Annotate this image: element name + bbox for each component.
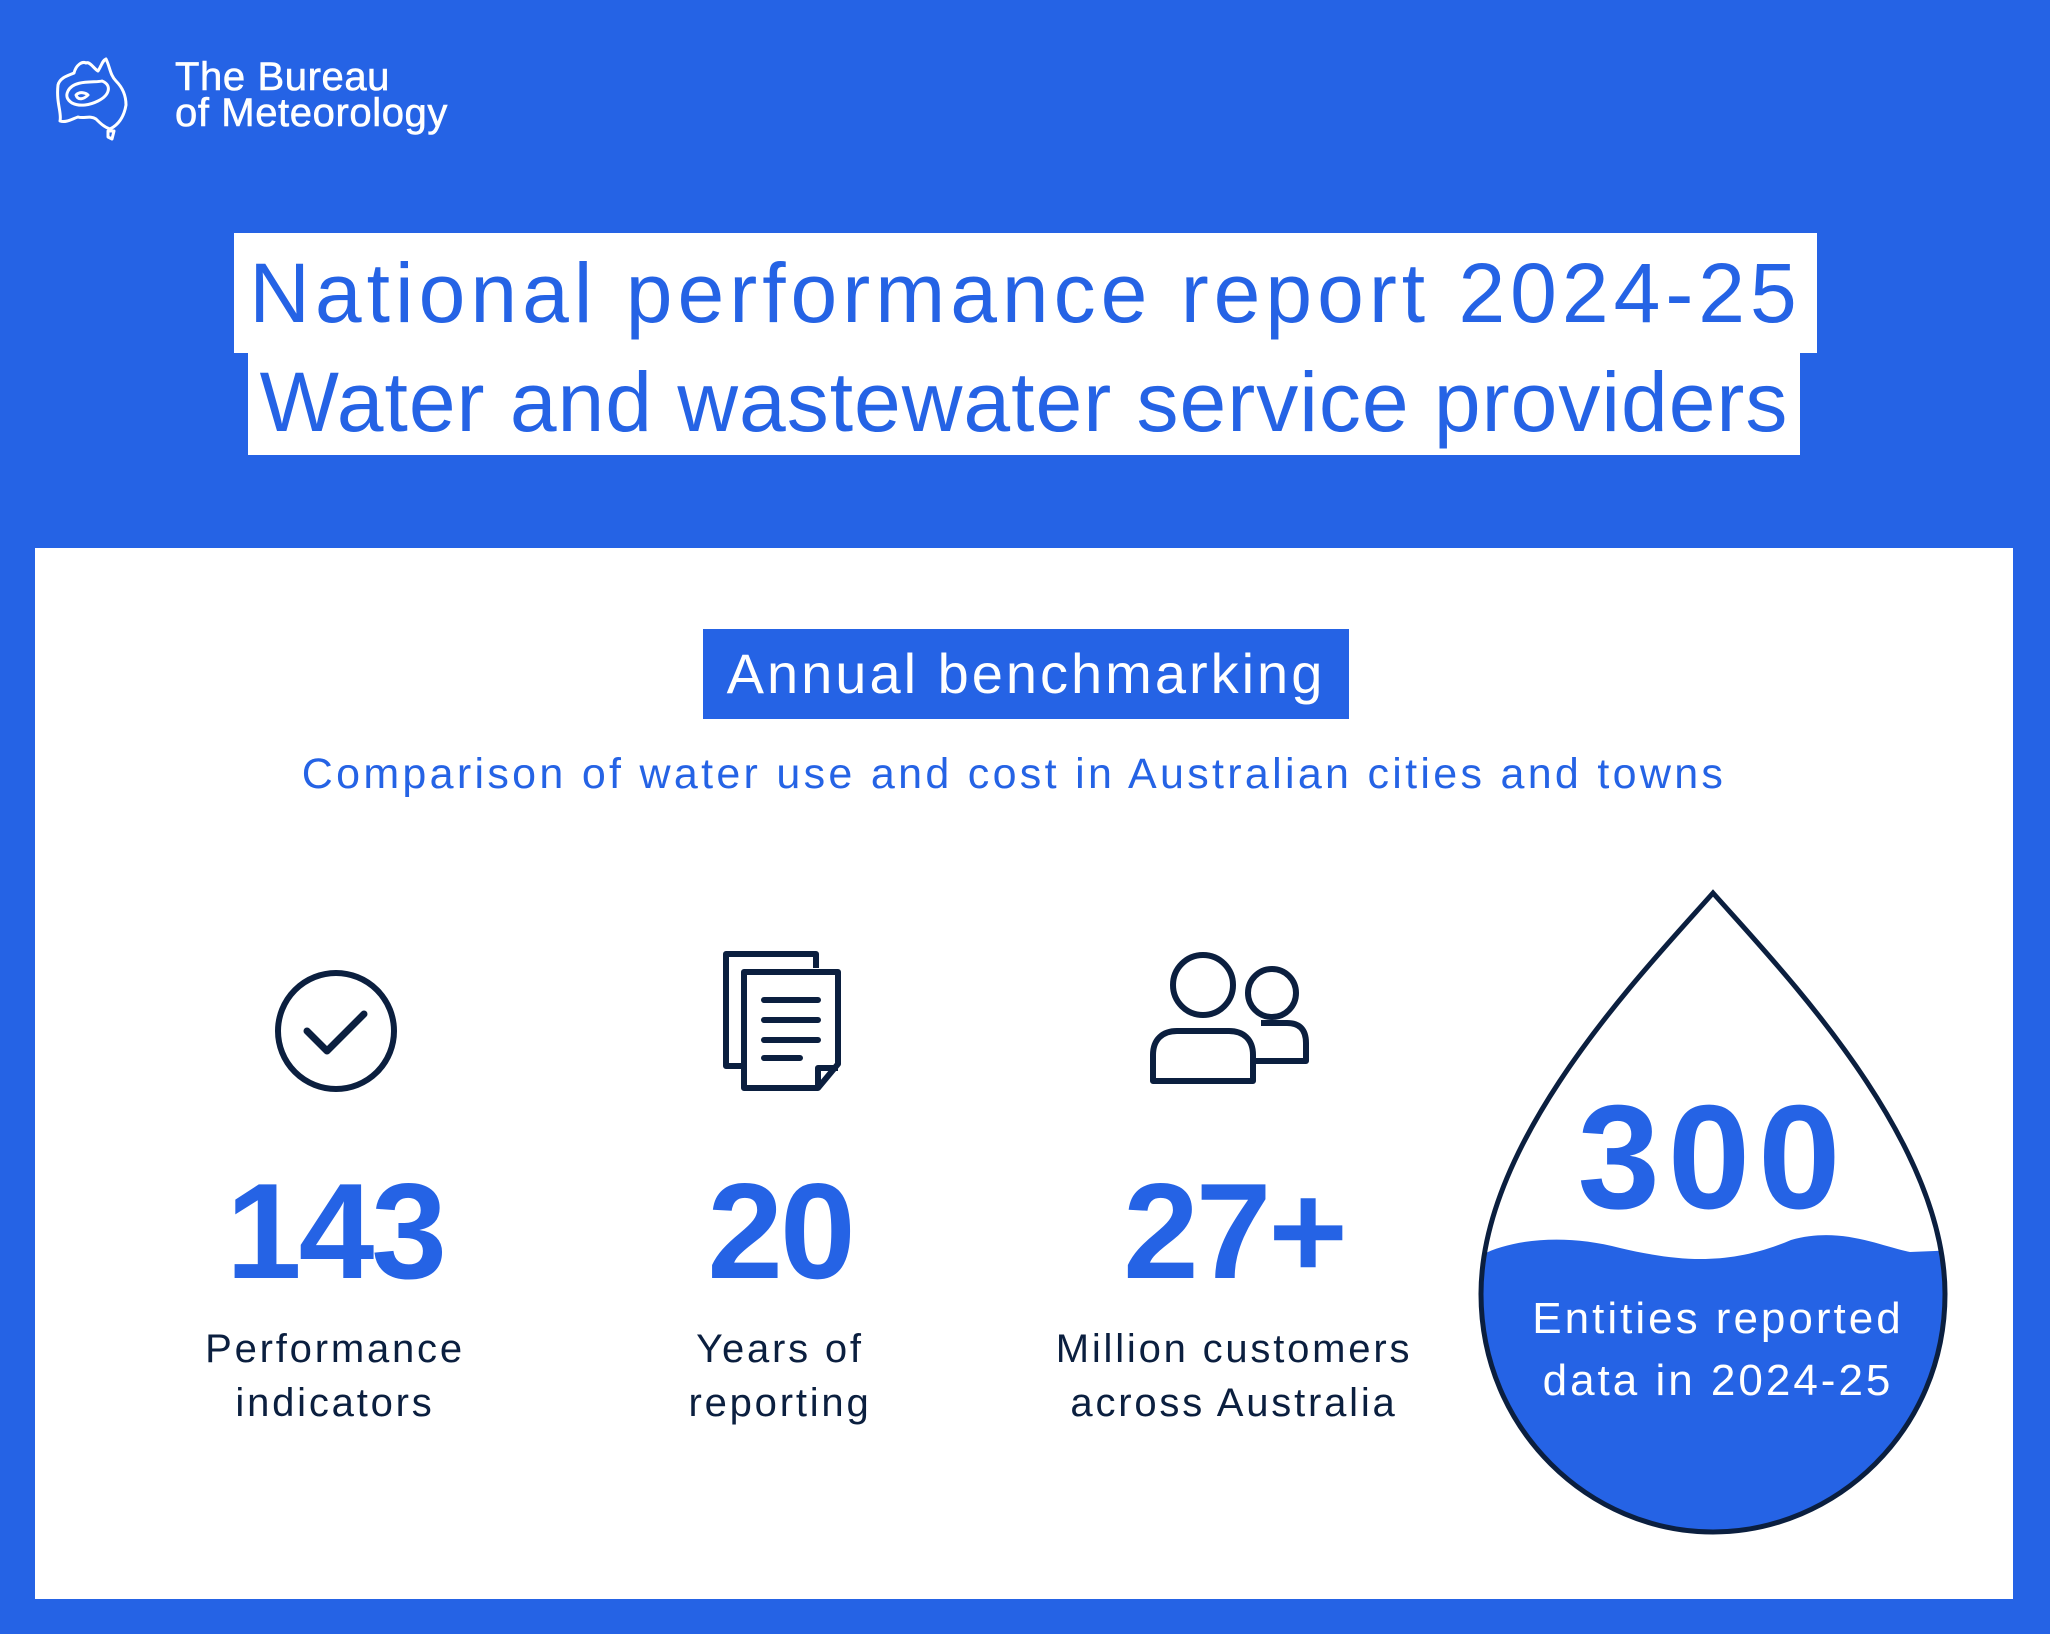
stat: 27+ — [1056, 952, 1412, 1425]
title line 2: Water and wastewater service providers — [260, 355, 1788, 449]
logo text: The Bureau — [175, 55, 390, 99]
number: 143 — [226, 1155, 444, 1307]
icon: check circle — [275, 970, 397, 1092]
label: indicators — [235, 1381, 435, 1425]
icon: australia map — [56, 57, 128, 140]
label: Million customers — [1056, 1327, 1412, 1371]
number: 27+ — [1123, 1155, 1345, 1307]
logo text — [175, 55, 448, 135]
wave fill — [1484, 1235, 1942, 1530]
icon: documents — [723, 951, 841, 1091]
label: reporting — [688, 1381, 872, 1425]
title line 1: National performance report 2024-25 — [249, 246, 1802, 340]
heading: annual benchmarking: Annual benchmarking — [727, 642, 1325, 705]
logo text: of Meteorology — [175, 91, 448, 135]
label — [205, 1327, 465, 1425]
logo — [56, 55, 448, 140]
label: Years of — [696, 1327, 864, 1371]
subtitle: Comparison of water use and cost in Australian cities and towns — [302, 750, 1726, 798]
number: 20 — [707, 1155, 853, 1307]
label — [688, 1327, 872, 1425]
stat: 143 — [205, 970, 465, 1425]
icon: people — [1150, 952, 1309, 1084]
heading: annual benchmarking — [703, 629, 1349, 719]
drop: 300 entities — [1478, 889, 1948, 1534]
panel: main — [35, 548, 2013, 1599]
drop outline — [1481, 893, 1945, 1532]
drop: 300 entities: data in 2024-25 — [1543, 1356, 1893, 1405]
title — [234, 233, 1817, 455]
stat: 20 — [688, 951, 872, 1425]
number 300: 300 — [1578, 1075, 1848, 1240]
label: Performance — [205, 1327, 465, 1371]
drop label: Entities reported — [1532, 1294, 1904, 1343]
label: across Australia — [1070, 1381, 1398, 1425]
label — [1056, 1327, 1412, 1425]
